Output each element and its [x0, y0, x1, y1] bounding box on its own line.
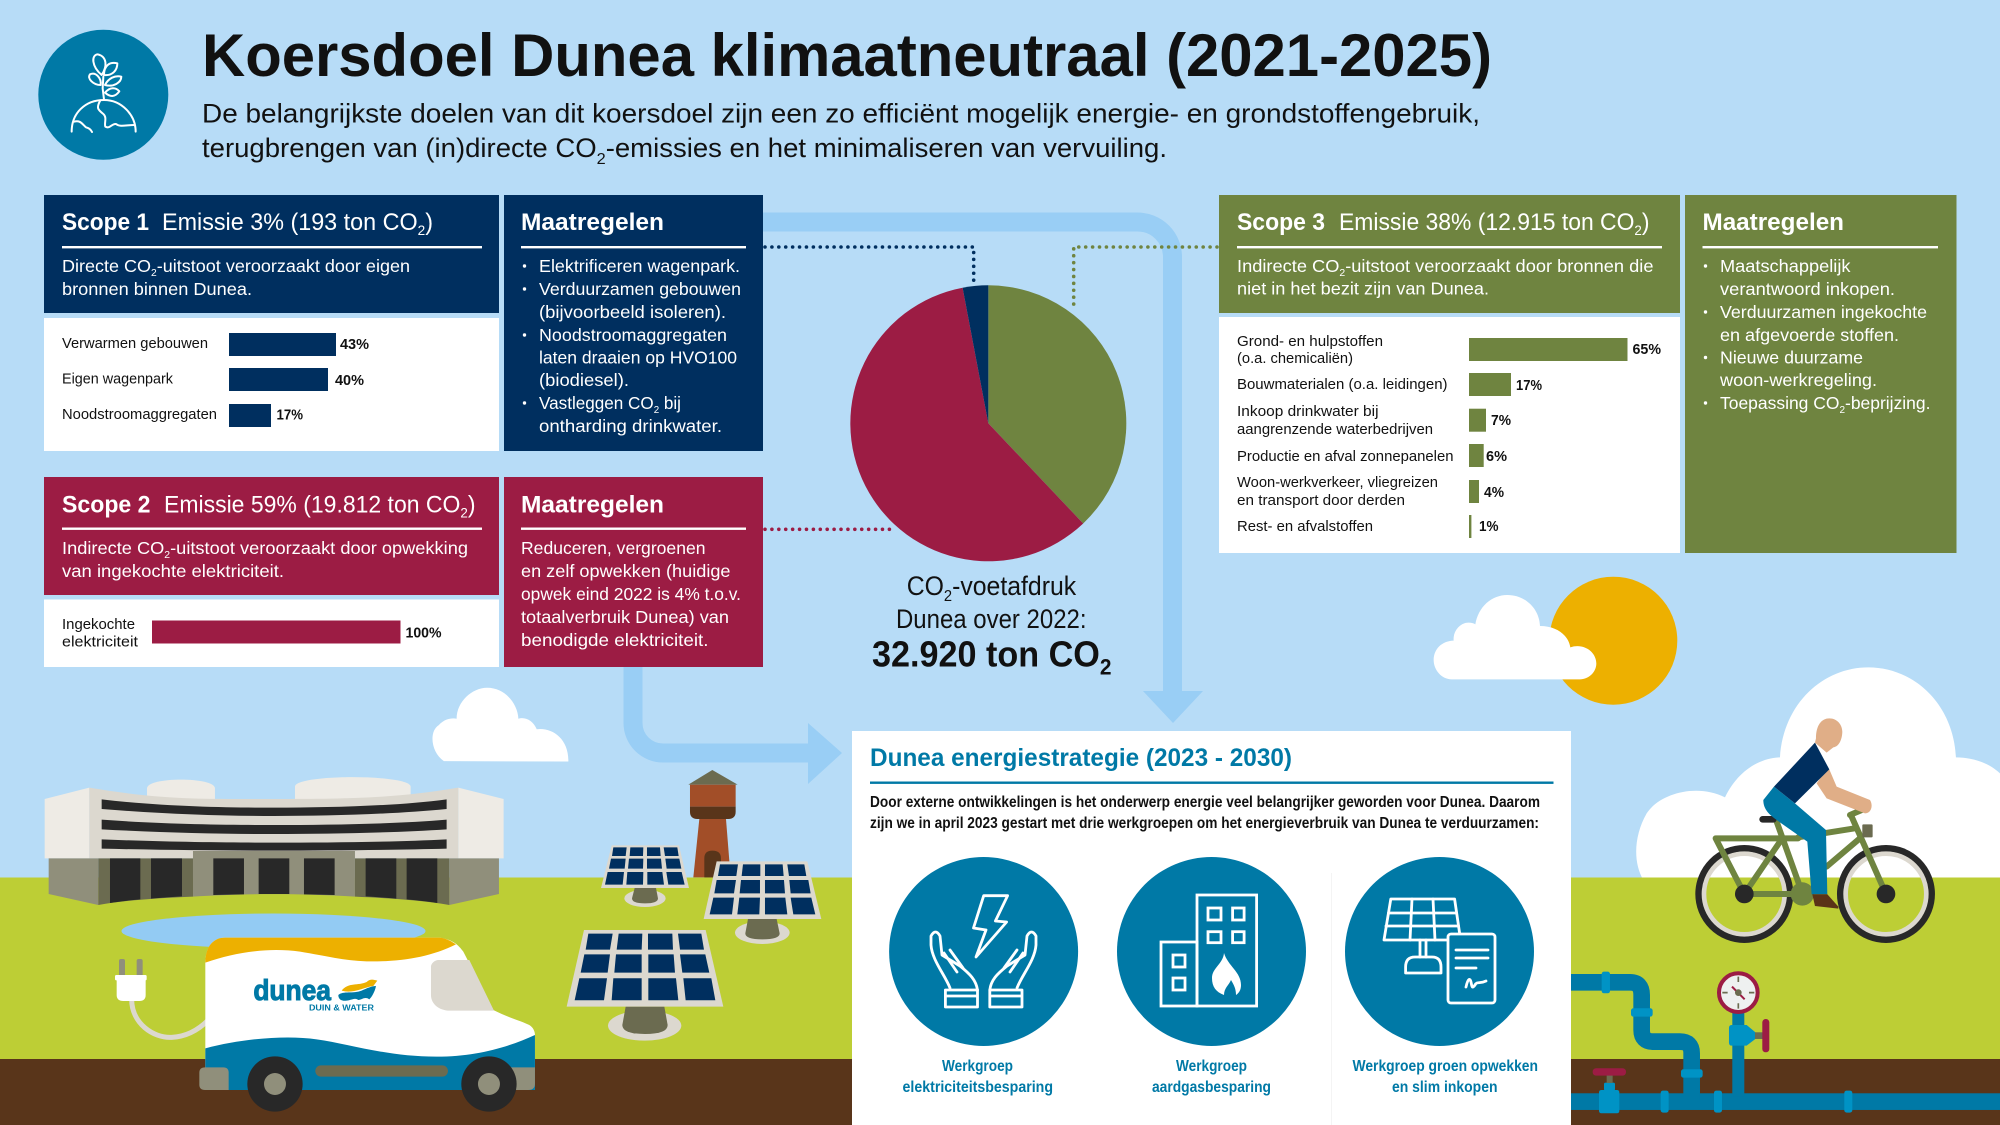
- scope 3 measures list: Nieuwe duurzame: [1720, 348, 1863, 368]
- icon: globe with plant: [38, 30, 168, 160]
- arrow head: right: [808, 723, 842, 784]
- scope 2 measures text: en zelf opwekken (huidige: [521, 561, 730, 581]
- scope 2 description: van ingekochte elektriciteit.: [62, 561, 284, 581]
- strategy heading: Dunea energiestrategie (2023 - 2030): [870, 744, 1292, 772]
- working group label: natural gas saving: Werkgroep: [1176, 1058, 1247, 1075]
- scope 2 description: [62, 538, 468, 581]
- scope 1 description: Directe CO: [62, 256, 149, 276]
- working group label: green generation and smart purchasing: en slim inkopen: [1392, 1079, 1498, 1096]
- scope 3 bar chart: Grond- en hulpstoffen: [1237, 333, 1383, 350]
- panel: scope 2 measures: Maatregelen: [521, 492, 664, 518]
- cloud: behind cyclist: [1636, 667, 2000, 880]
- subtitle: terugbrengen van (in)directe CO: [202, 133, 589, 163]
- scope 1 description: [62, 256, 410, 299]
- panel: scope 1: [44, 195, 499, 451]
- scope 3 heading: ): [1642, 209, 1650, 236]
- scope 1 bar chart: [44, 318, 499, 451]
- pie caption: 2: [944, 588, 952, 605]
- scope 2 bar chart: Ingekochte: [62, 616, 135, 633]
- scope 3 bar chart: Inkoop drinkwater bij: [1237, 403, 1378, 420]
- sun: [1549, 577, 1677, 705]
- scope 1 measures list: Vastleggen CO: [539, 393, 656, 413]
- front wheel: [1840, 848, 1932, 940]
- scope 3 bar chart: Woon-werkverkeer, vliegreizen: [1237, 474, 1438, 491]
- solar panel: small: [601, 845, 689, 907]
- scope 2 bar chart: 100%: [406, 626, 442, 642]
- scope 3 measures list: woon-werkregeling.: [1719, 370, 1877, 390]
- scope 2 measures text: [521, 538, 741, 650]
- solar panel: front: [567, 930, 723, 1041]
- bicycle frame: [1716, 809, 1886, 894]
- cloud: left: [432, 688, 568, 762]
- scope 1 bar chart: 40%: [335, 373, 364, 389]
- dotted connector: scope 3 to pie: [1074, 247, 1217, 308]
- scope 3 measures list: Toepassing CO: [1720, 393, 1840, 413]
- title: Koersdoel Dunea klimaatneutraal (2021-2025): [202, 22, 1492, 89]
- scope 3 bar chart: Bouwmaterialen (o.a. leidingen): [1237, 376, 1448, 393]
- illustration: water tower and solar panels: [567, 770, 821, 1041]
- panel: energy strategy: [852, 731, 1571, 1125]
- pie caption: -voetafdruk: [952, 571, 1077, 601]
- scope 2 description: 2: [164, 550, 171, 561]
- icon: hands and lightning: [889, 857, 1078, 1046]
- grass: [0, 878, 2000, 1060]
- scope 1 measures list: Verduurzamen gebouwen: [539, 279, 741, 299]
- scope 3 measures list: 2: [1839, 405, 1845, 416]
- scope 3 bar chart: 4%: [1484, 485, 1504, 501]
- arrow: from scope 2 measures to energy strategy: [633, 660, 810, 753]
- working group label: electricity saving: elektriciteitsbesparing: [902, 1079, 1053, 1096]
- scope 3 header box: [1219, 195, 1680, 313]
- rear wheel: [1699, 848, 1790, 940]
- panel: scope 2: [44, 477, 499, 667]
- scope 3 measures list: Maatschappelijk: [1720, 256, 1851, 276]
- scope 3 bar chart: 7%: [1491, 413, 1511, 429]
- scope 1 measures list: Noodstroomaggregaten: [539, 325, 727, 345]
- scope 2 measures text: benodigde elektriciteit.: [521, 630, 708, 650]
- subtitle: 2: [597, 151, 606, 168]
- illustration: water pipes: [1571, 972, 2000, 1113]
- working group label: electricity saving: [902, 1058, 1053, 1096]
- scope 2 header box: [44, 477, 499, 595]
- scope 1 bar chart: Eigen wagenpark: [62, 370, 173, 388]
- soil: [0, 1059, 2000, 1125]
- panel: scope 3: [1219, 195, 1680, 553]
- shut-off valve: [1593, 1068, 1626, 1113]
- scope 1 heading: Emissie 3% (193 ton CO: [162, 209, 425, 236]
- cloud: in front of sun: [1434, 595, 1596, 679]
- scope 1 heading: 2: [418, 222, 425, 238]
- pie caption: [872, 571, 1112, 680]
- scope 2 measures text: Reduceren, vergroenen: [521, 538, 706, 558]
- scope 3 description: -uitstoot veroorzaakt door bronnen die: [1345, 256, 1654, 276]
- scope 3 measures list: -beprijzing.: [1845, 393, 1930, 413]
- scope 1 measures list: (biodiesel).: [539, 370, 629, 390]
- pie caption: 2: [1100, 654, 1112, 680]
- scope 2 measures text: opwek eind 2022 is 4% t.o.v.: [521, 584, 741, 604]
- scope 1 description: bronnen binnen Dunea.: [62, 279, 252, 299]
- scope 3 measures list: en afgevoerde stoffen.: [1720, 325, 1899, 345]
- water tower: [688, 770, 738, 877]
- panel: scope 2 measures: [504, 477, 763, 667]
- illustration: pond: [122, 914, 426, 948]
- subtitle: -emissies en het minimaliseren van vervuiling.: [606, 133, 1167, 163]
- scope 1 measures list: bij: [659, 393, 681, 413]
- working group label: natural gas saving: aardgasbesparing: [1152, 1079, 1271, 1096]
- scope 3 heading: [1237, 209, 1650, 238]
- scope 1 measures list: laten draaien op HVO100: [539, 348, 737, 368]
- scope 3 bar chart: en transport door derden: [1237, 492, 1405, 509]
- scope 3 bar chart: 65%: [1632, 342, 1661, 358]
- working group label: natural gas saving: [1152, 1058, 1271, 1096]
- pie chart: CO2 footprint by scope: [850, 285, 1126, 561]
- scope 3 description: 2: [1339, 268, 1346, 279]
- working group label: green generation and smart purchasing: [1352, 1058, 1538, 1096]
- scope 3 bar chart: (o.a. chemicaliën): [1237, 350, 1353, 367]
- scope 3 bar chart: Productie en afval zonnepanelen: [1237, 448, 1454, 465]
- subtitle: [202, 98, 1480, 168]
- pie caption: CO: [907, 571, 947, 601]
- rider: [1763, 718, 1872, 909]
- scope 2 heading: Emissie 59% (19.812 ton CO: [164, 492, 473, 518]
- scope 1 measures list: ontharding drinkwater.: [539, 416, 722, 436]
- scope 2 description: -uitstoot veroorzaakt door opwekking: [170, 538, 468, 558]
- illustration: electric van: [115, 938, 535, 1112]
- panel: scope 3 measures: Maatregelen: [1702, 209, 1844, 236]
- scope 1 measures list: (bijvoorbeeld isoleren).: [539, 302, 726, 322]
- scope 3 description: [1237, 256, 1654, 298]
- scope 3 heading: Scope 3: [1237, 209, 1325, 236]
- panel: scope 1 measures: Maatregelen: [521, 209, 664, 236]
- strategy intro text: [870, 794, 1540, 832]
- panel: scope 1 measures: [504, 195, 763, 451]
- scope 3 heading: Emissie 38% (12.915 ton CO: [1339, 209, 1648, 236]
- scope 3 bar chart: 17%: [1516, 378, 1542, 394]
- scope 1 description: -uitstoot veroorzaakt door eigen: [157, 256, 410, 276]
- illustration: main building: [45, 777, 504, 905]
- scope 1 bar chart: 17%: [276, 408, 303, 424]
- scope 3 measures list: Verduurzamen ingekochte: [1720, 302, 1927, 322]
- scope 3 bar chart: [1219, 317, 1680, 553]
- scope 3 bar chart: 6%: [1486, 449, 1507, 465]
- icon: buildings and flame: [1117, 857, 1306, 1046]
- scope 2 measures text: totaalverbruik Dunea) van: [521, 607, 729, 627]
- arrow head: down: [1143, 691, 1203, 723]
- scope 1 bar chart: 43%: [340, 337, 369, 353]
- scope 2 heading: ): [468, 492, 476, 518]
- pie caption: 32.920 ton CO: [872, 634, 1112, 674]
- scope 1 header box: [44, 195, 499, 313]
- scope 1 bar chart: Verwarmen gebouwen: [62, 335, 208, 352]
- pie caption: Dunea over 2022:: [896, 604, 1086, 634]
- dotted connector: scope 1 to pie: [765, 247, 974, 282]
- scope 1 measures list: Elektrificeren wagenpark.: [539, 256, 740, 276]
- strategy intro text: Door externe ontwikkelingen is het onderwerp energie veel belangrijker geworden voor Dunea. Daarom: [870, 794, 1540, 811]
- van logo: dunea: dunea: [253, 975, 332, 1007]
- power cable and plug: [115, 959, 208, 1037]
- scope 3 bar chart: 1%: [1479, 519, 1499, 535]
- subtitle: De belangrijkste doelen van dit koersdoel zijn een zo efficiënt mogelijk energie- en grondstoffengebruik,: [202, 98, 1480, 128]
- scope 2 description: Indirecte CO: [62, 538, 160, 558]
- scope 1 description: 2: [151, 268, 157, 279]
- strategy intro text: zijn we in april 2023 gestart met drie werkgroepen om het energieverbruik van Dunea te verduurzamen:: [870, 815, 1539, 832]
- scope 2 heading: 2: [460, 504, 468, 520]
- scope 2 heading: Scope 2: [62, 492, 150, 518]
- dotted connector: scope 2 to pie: [765, 527, 896, 531]
- scope 1 measures list: [523, 256, 741, 436]
- scope 2 bar chart: [44, 600, 499, 667]
- panel: scope 3 measures: [1685, 195, 1956, 553]
- van logo: dunea: DUIN & WATER: [309, 1004, 374, 1013]
- scope 1 heading: ): [425, 209, 433, 236]
- scope 1 bar chart: Noodstroomaggregaten: [62, 406, 217, 423]
- scope 3 measures list: verantwoord inkopen.: [1720, 279, 1895, 299]
- working group label: electricity saving: Werkgroep: [942, 1058, 1013, 1075]
- solar panel: right: [704, 861, 821, 944]
- scope 1 heading: [62, 209, 433, 238]
- pressure gauge and valve: [1719, 973, 1769, 1052]
- scope 2 heading: [62, 492, 476, 520]
- working group label: green generation and smart purchasing: Werkgroep groen opwekken: [1352, 1058, 1538, 1075]
- scope 3 description: Indirecte CO: [1237, 256, 1335, 276]
- scope 3 bar chart: aangrenzende waterbedrijven: [1237, 421, 1433, 438]
- scope 3 bar chart: Rest- en afvalstoffen: [1237, 518, 1373, 535]
- scope 1 measures list: 2: [654, 405, 660, 416]
- arrow: from scope 1 measures to energy strategy: [760, 222, 1172, 695]
- scope 3 measures list: [1704, 256, 1930, 416]
- scope 3 heading: 2: [1634, 222, 1642, 238]
- scope 1 heading: Scope 1: [62, 209, 149, 236]
- illustration: cyclist: [1699, 718, 1932, 940]
- scope 3 description: niet in het bezit zijn van Dunea.: [1237, 278, 1489, 298]
- scope 2 bar chart: elektriciteit: [62, 634, 139, 650]
- icon: solar panel and document: [1345, 857, 1534, 1046]
- van logo: dunea: [253, 975, 377, 1013]
